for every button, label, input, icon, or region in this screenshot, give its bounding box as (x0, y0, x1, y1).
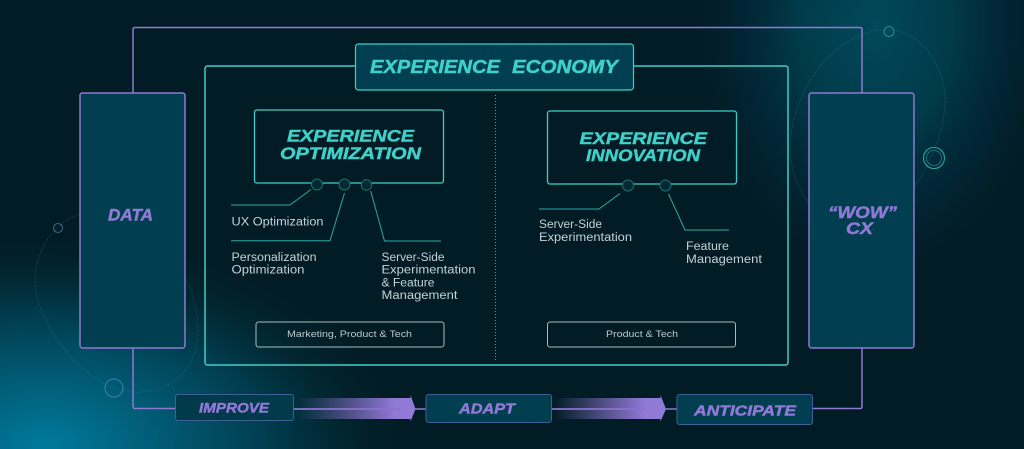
arrow: adapt to anticipate (551, 395, 677, 422)
optimization labels: Personalization (232, 252, 316, 264)
panel: wow cx: “WOW” (828, 204, 898, 222)
heading: experience innovation: EXPERIENCE (580, 129, 708, 148)
panel: data (80, 93, 185, 348)
connector nodes and lines: innovation (539, 180, 729, 230)
optimization labels: Management (382, 290, 458, 302)
optimization labels: Experimentation (382, 264, 476, 276)
innovation labels: Server-Side (539, 219, 602, 231)
innovation labels (539, 219, 763, 266)
divider: center dotted line (494, 95, 496, 362)
optimization labels (232, 216, 476, 302)
heading: experience innovation (548, 111, 736, 184)
heading: experience optimization: OPTIMIZATION (280, 144, 422, 163)
panel: wow cx: CX (846, 220, 874, 238)
team pill: product and tech (548, 322, 736, 347)
heading: experience optimization (254, 110, 444, 183)
innovation labels: Experimentation (539, 232, 632, 244)
step: anticipate: ANTICIPATE (693, 402, 797, 419)
right orbit decoration (790, 26, 945, 202)
innovation labels: Feature (686, 241, 729, 253)
step: adapt: ADAPT (458, 402, 516, 418)
optimization labels: UX Optimization (232, 216, 324, 228)
heading: experience economy: ECONOMY (512, 57, 620, 77)
connector nodes and lines: optimization (231, 179, 441, 241)
heading: experience economy: EXPERIENCE (370, 57, 501, 77)
heading: experience optimization: EXPERIENCE (287, 126, 415, 146)
team pill: marketing, product and tech: Marketing, Product & Tech (287, 329, 412, 340)
optimization labels: & Feature (382, 278, 434, 290)
optimization labels: Optimization (232, 264, 304, 276)
heading: experience innovation: INNOVATION (586, 146, 701, 165)
team pill: product and tech: Product & Tech (606, 329, 678, 340)
innovation labels: Management (686, 254, 763, 266)
team pill: marketing, product and tech (256, 322, 444, 347)
step: improve: IMPROVE (199, 400, 270, 416)
panel: wow cx (809, 93, 914, 348)
panel: data: DATA (108, 206, 153, 224)
left orbit decoration (35, 214, 198, 397)
step: improve (176, 394, 294, 420)
arrow: improve to adapt (294, 395, 426, 422)
heading: experience economy (356, 44, 634, 90)
purple outer loop connector (133, 28, 862, 408)
step: anticipate (677, 394, 812, 424)
step: adapt (426, 394, 552, 422)
panel: experience economy frame (205, 66, 788, 365)
optimization labels: Server-Side (382, 252, 444, 264)
